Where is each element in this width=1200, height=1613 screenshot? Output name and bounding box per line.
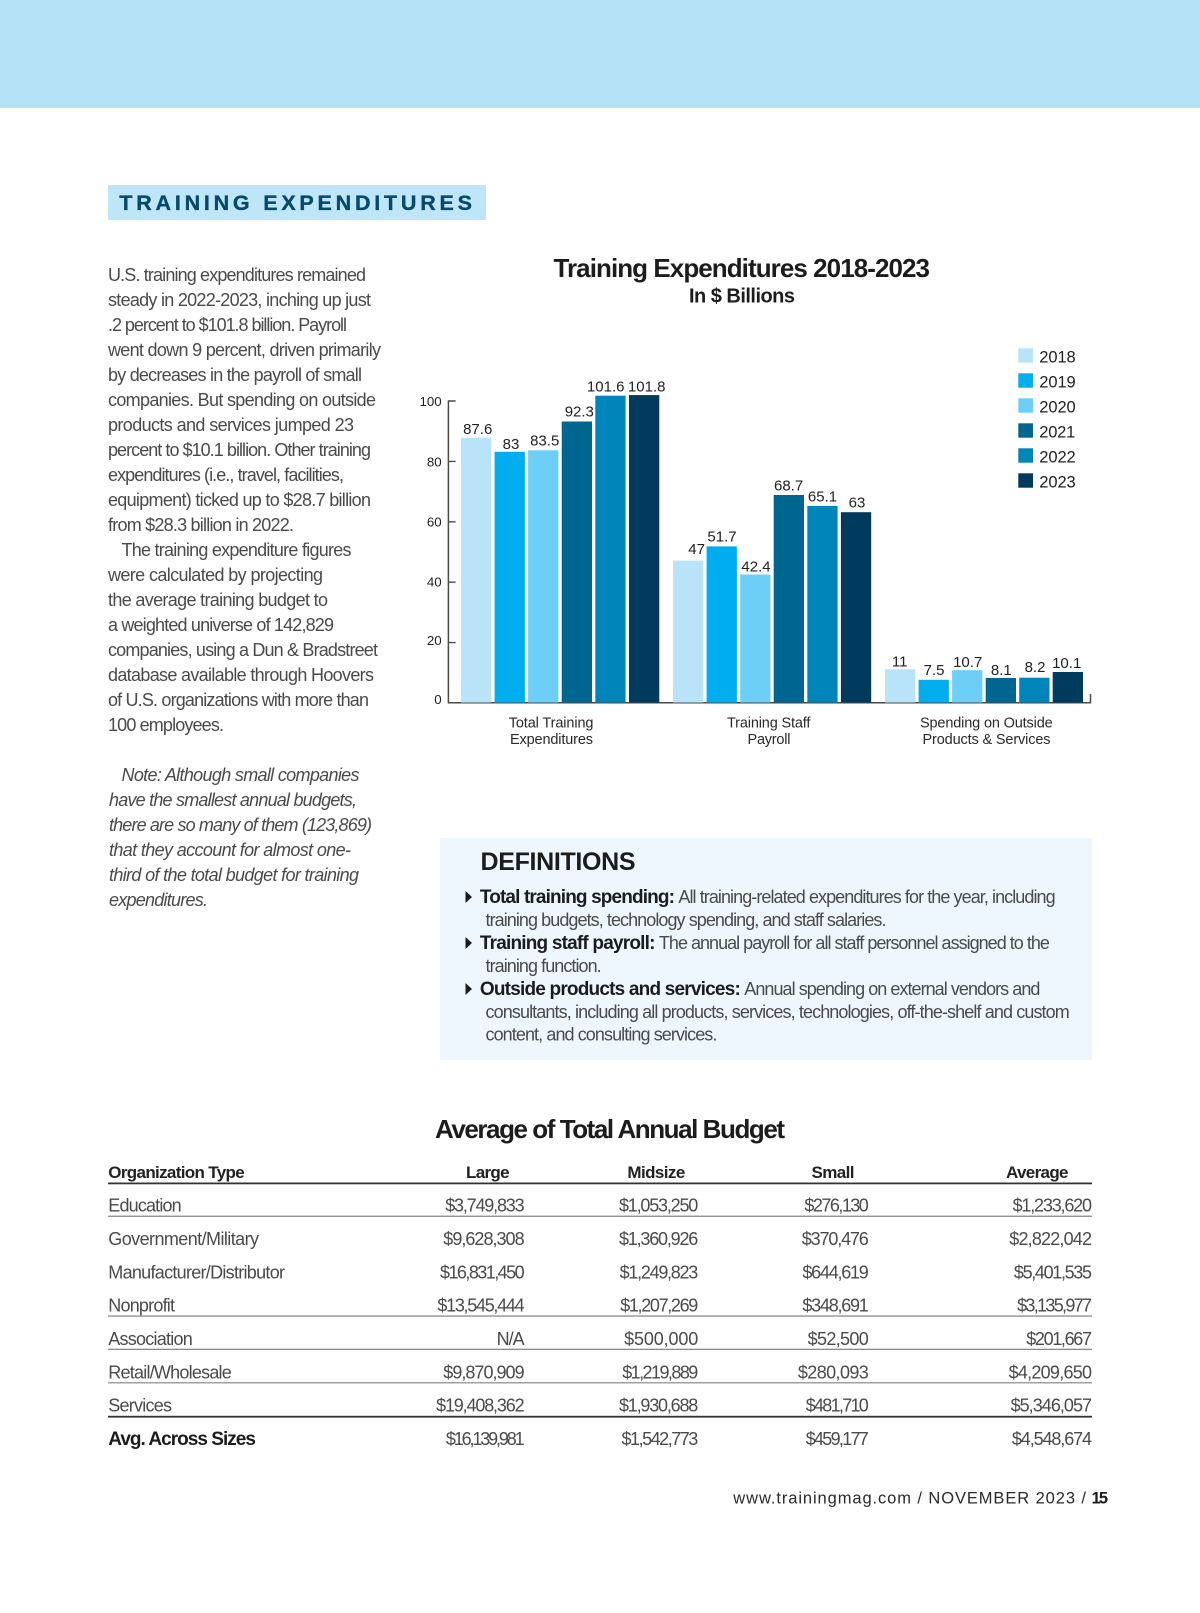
- text block: body copy: by decreases in the payroll of small: [108, 365, 362, 385]
- chart axes and y labels: 100: [420, 394, 442, 409]
- definition: training staff payroll: training function.: [486, 956, 602, 976]
- bars: total training expenditures: 87.6: [463, 421, 492, 438]
- row: association: $500,000: [624, 1329, 698, 1349]
- definition: outside products and services: Annual spending on external vendors and: [744, 979, 1040, 999]
- table header: Average: [1006, 1163, 1068, 1182]
- definition: outside products and services: [466, 979, 1070, 1045]
- table header: Midsize: [627, 1163, 685, 1182]
- text block: body copy: the average training budget to: [108, 590, 328, 610]
- row: association: $52,500: [808, 1329, 869, 1349]
- text block: body copy: The training expenditure figures: [122, 540, 352, 560]
- row: education: $1,233,620: [1013, 1196, 1092, 1216]
- row: manufacturer/distributor: Manufacturer/Distributor: [108, 1262, 285, 1282]
- row: nonprofit: [108, 1296, 1092, 1317]
- bars: training staff payroll: 51.7: [707, 528, 737, 546]
- text block: body copy: steady in 2022-2023, inching up just: [108, 290, 371, 310]
- row: government/military: [108, 1229, 1092, 1249]
- bars: total training expenditures: 83: [503, 436, 519, 453]
- chart axes and y labels: 0: [434, 692, 442, 707]
- chart title: In $ Billions: [689, 286, 795, 308]
- text block: italic note: there are so many of them (123,869): [109, 815, 372, 835]
- section heading: training expenditures: TRAINING EXPENDITURES: [119, 191, 472, 215]
- row: avg. across sizes: Avg. Across Sizes: [108, 1429, 256, 1450]
- bars: training staff payroll: 65.1: [808, 488, 837, 506]
- row: retail/wholesale: $280,093: [798, 1362, 869, 1382]
- row: avg. across sizes: [108, 1429, 1092, 1450]
- row: nonprofit: Nonprofit: [108, 1296, 175, 1316]
- chart axes and y labels: 40: [427, 575, 442, 590]
- chart legend: 2019: [1039, 373, 1076, 391]
- chart title: Training Expenditures 2018-2023: [554, 253, 930, 283]
- definition: training staff payroll: The annual payroll for all staff personnel assigned to the: [659, 933, 1050, 953]
- definition: outside products and services: consultants, including all products, services, technologies, off-the-shelf and custom: [486, 1002, 1070, 1022]
- row: avg. across sizes: $4,548,674: [1012, 1429, 1092, 1449]
- text block: italic note: expenditures.: [109, 890, 208, 910]
- row: retail/wholesale: [108, 1362, 1092, 1384]
- footer: page line: www.trainingmag.com / NOVEMBER 2023 /: [732, 1489, 1086, 1507]
- row: services: Services: [108, 1396, 172, 1416]
- chart axes and y labels: 60: [427, 514, 442, 529]
- row: government/military: Government/Military: [108, 1229, 259, 1249]
- bars: training staff payroll: [673, 478, 871, 702]
- text block: body copy: database available through Hoovers: [108, 665, 374, 685]
- table header: [108, 1163, 1092, 1184]
- chart legend: [1018, 348, 1076, 491]
- row: education: $1,053,250: [619, 1196, 698, 1216]
- bars: total training expenditures: 83.5: [530, 432, 559, 450]
- bars: spending on outside products and services: 10.1: [1052, 655, 1081, 672]
- text block: body copy: were calculated by projecting: [107, 565, 323, 585]
- text block: body copy: products and services jumped 23: [108, 415, 354, 435]
- text block: body copy: U.S. training expenditures remained: [108, 265, 366, 285]
- row: services: [108, 1396, 1092, 1418]
- category axis labels: Total Training: [509, 715, 594, 731]
- chart legend: 2021: [1039, 423, 1075, 441]
- bars: spending on outside products and services: 11: [892, 654, 907, 670]
- row: education: Education: [108, 1196, 182, 1216]
- footer: page line: 15: [1092, 1489, 1108, 1507]
- row: services: $481,710: [806, 1396, 869, 1416]
- definition: outside products and services: content, and consulting services.: [486, 1025, 717, 1045]
- panel: definitions: [440, 838, 1092, 1060]
- section heading: training expenditures: [108, 185, 486, 220]
- bars: total training expenditures: [461, 379, 665, 702]
- row: retail/wholesale: $4,209,650: [1009, 1362, 1092, 1382]
- bars: spending on outside products and services: 8.1: [991, 662, 1012, 679]
- text block: body copy: 100 employees.: [108, 715, 224, 735]
- row: retail/wholesale: $1,219,889: [622, 1362, 698, 1382]
- row: avg. across sizes: $459,177: [806, 1429, 869, 1449]
- row: manufacturer/distributor: $644,619: [802, 1262, 869, 1282]
- definition: training staff payroll: [466, 933, 1050, 976]
- row: nonprofit: $348,691: [802, 1296, 869, 1316]
- text block: italic note: [109, 765, 372, 910]
- text block: body copy: percent to $10.1 billion. Other training: [108, 440, 371, 460]
- text block: italic note: that they account for almost one-: [109, 840, 351, 860]
- category axis labels: Payroll: [748, 732, 790, 748]
- row: manufacturer/distributor: [108, 1262, 1092, 1282]
- row: education: [108, 1196, 1092, 1217]
- row: government/military: $370,476: [802, 1229, 869, 1249]
- row: association: $201,667: [1026, 1329, 1092, 1349]
- row: nonprofit: $1,207,269: [620, 1296, 698, 1316]
- definition: training staff payroll: Training staff payroll:: [480, 933, 655, 954]
- table header: Small: [812, 1163, 854, 1182]
- text block: italic note: Note: Although small companies: [122, 765, 360, 785]
- category axis labels: [509, 715, 1053, 748]
- bars: spending on outside products and services: 7.5: [924, 662, 944, 679]
- bars: spending on outside products and services: 10.7: [953, 654, 982, 671]
- bars: training staff payroll: 47: [688, 541, 705, 558]
- chart axes and y labels: [420, 394, 1090, 707]
- row: manufacturer/distributor: $5,401,535: [1014, 1262, 1092, 1282]
- bars: training staff payroll: 42.4: [741, 558, 771, 576]
- category axis labels: Spending on Outside: [920, 715, 1053, 731]
- table header: Large: [466, 1163, 510, 1182]
- definitions heading: DEFINITIONS: [480, 848, 636, 876]
- definition: total training spending: Total training spending:: [480, 887, 675, 908]
- row: avg. across sizes: $16,139,981: [446, 1429, 525, 1449]
- row: services: $19,408,362: [436, 1396, 525, 1416]
- row: retail/wholesale: $9,870,909: [443, 1362, 525, 1382]
- chart legend: 2018: [1039, 348, 1076, 366]
- chart legend: 2023: [1039, 473, 1076, 491]
- text block: italic note: have the smallest annual budgets,: [109, 790, 357, 810]
- row: association: Association: [108, 1329, 193, 1349]
- chart axes and y labels: 20: [427, 633, 442, 648]
- row: avg. across sizes: $1,542,773: [622, 1429, 698, 1449]
- bars: total training expenditures: 101.6: [587, 379, 624, 396]
- category axis labels: Training Staff: [727, 715, 811, 731]
- table: average of total annual budget: [108, 1163, 1092, 1450]
- text block: body copy: a weighted universe of 142,829: [108, 615, 334, 635]
- text block: body copy: went down 9 percent, driven primarily: [107, 340, 381, 360]
- table header: Organization Type: [108, 1163, 245, 1182]
- row: services: $5,346,057: [1011, 1396, 1092, 1416]
- text block: body copy: companies, using a Dun & Bradstreet: [108, 640, 378, 660]
- bars: total training expenditures: 101.8: [628, 379, 665, 396]
- row: education: $276,130: [804, 1196, 869, 1216]
- text block: body copy: [107, 265, 381, 735]
- row: manufacturer/distributor: $1,249,823: [620, 1262, 698, 1282]
- row: manufacturer/distributor: $16,831,450: [440, 1262, 525, 1282]
- bars: spending on outside products and services: [885, 654, 1083, 702]
- text block: body copy: companies. But spending on outside: [108, 390, 376, 410]
- chart title: [554, 253, 930, 308]
- bar chart: training expenditures: [420, 348, 1090, 748]
- text block: body copy: from $28.3 billion in 2022.: [108, 515, 294, 535]
- text block: italic note: third of the total budget for training: [109, 865, 359, 885]
- row: association: [108, 1329, 1092, 1350]
- row: services: $1,930,688: [619, 1396, 698, 1416]
- text block: body copy: equipment) ticked up to $28.7 billion: [108, 490, 371, 510]
- row: government/military: $9,628,308: [443, 1229, 525, 1249]
- row: association: N/A: [497, 1329, 525, 1349]
- chart axes and y labels: 80: [427, 454, 442, 469]
- table title: Average of Total Annual Budget: [435, 1114, 785, 1144]
- row: retail/wholesale: Retail/Wholesale: [108, 1362, 232, 1382]
- category axis labels: Expenditures: [510, 732, 593, 748]
- definition: total training spending: [466, 887, 1056, 930]
- chart legend: 2022: [1039, 448, 1076, 466]
- bars: training staff payroll: 63: [849, 494, 865, 512]
- row: government/military: $2,822,042: [1009, 1229, 1092, 1249]
- category axis labels: Products & Services: [922, 732, 1050, 748]
- row: nonprofit: $3,135,977: [1017, 1296, 1092, 1316]
- definition: total training spending: All training-related expenditures for the year, including: [678, 887, 1056, 907]
- text block: body copy: expenditures (i.e., travel, facilities,: [108, 465, 344, 485]
- text block: body copy: of U.S. organizations with more than: [108, 690, 369, 710]
- row: nonprofit: $13,545,444: [437, 1296, 525, 1316]
- top banner: [0, 0, 1200, 108]
- definition: outside products and services: Outside products and services:: [480, 979, 741, 1000]
- chart legend: 2020: [1039, 398, 1076, 416]
- definition: total training spending: training budgets, technology spending, and staff salaries.: [486, 910, 886, 930]
- row: government/military: $1,360,926: [619, 1229, 698, 1249]
- row: education: $3,749,833: [445, 1196, 525, 1216]
- bars: spending on outside products and services: 8.2: [1025, 659, 1045, 676]
- bars: total training expenditures: 92.3: [565, 404, 594, 420]
- bars: training staff payroll: 68.7: [774, 478, 803, 495]
- text block: body copy: .2 percent to $101.8 billion. Payroll: [108, 315, 347, 335]
